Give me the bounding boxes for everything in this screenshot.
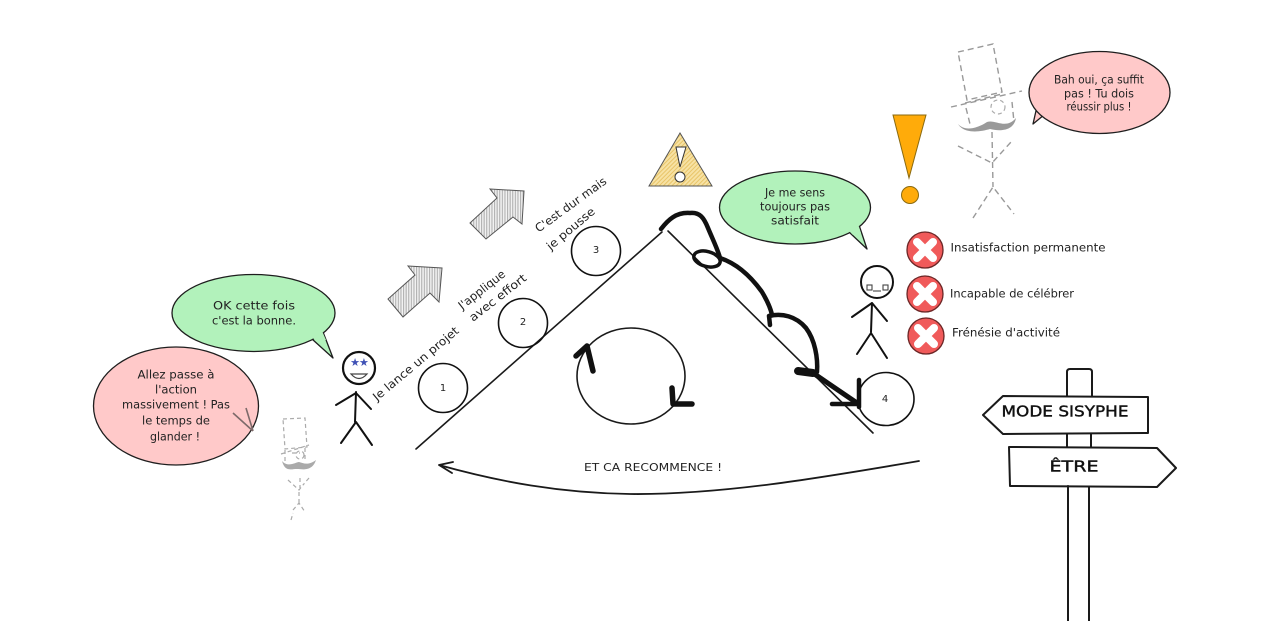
signpost: MODE SISYPHE (1002, 402, 1128, 420)
symptom: Insatisfaction permanente (907, 232, 1106, 268)
step 2 ball (498, 298, 548, 348)
label: C'est dur mais je pousse: je pousse (543, 204, 598, 254)
descending slope line (668, 231, 873, 433)
stick figure: happy with star eyes: ★★ (350, 356, 369, 369)
large ghost character with top hat (951, 44, 1022, 218)
label: ET CA RECOMMENCE !: ET CA RECOMMENCE ! (584, 462, 722, 474)
orange exclamation mark icon (893, 115, 926, 204)
label: J'applique avec effort: avec effort (466, 271, 530, 324)
step 4 ball (858, 372, 914, 426)
step 1 ball: 1 (440, 383, 446, 394)
thick tumbling path (661, 213, 859, 407)
signpost: ÊTRE (1050, 456, 1098, 476)
red speech bubble: Allez passe à l'action (94, 347, 258, 465)
main slope line up (416, 232, 662, 449)
hatched arrow 2 (470, 189, 524, 239)
red speech bubble: Allez passe à l'action: massivement ! Pas (122, 398, 230, 412)
signpost (983, 369, 1176, 621)
green speech bubble: OK cette fois (172, 274, 335, 358)
small ghost character with top hat (281, 418, 316, 520)
red speech bubble: Bah oui ça suffit (1029, 52, 1170, 134)
cycle circle with arrowheads (576, 328, 692, 424)
stick figure: tired (852, 266, 893, 358)
curved return arrow (439, 461, 919, 494)
red speech bubble: Bah oui ça suffit: pas ! Tu dois (1064, 86, 1134, 100)
red speech bubble: Allez passe à l'action: l'action (155, 382, 197, 396)
step 3 ball: 3 (593, 245, 599, 256)
red speech bubble: Allez passe à l'action: Allez passe à (138, 368, 214, 382)
label: C'est dur mais je pousse: C'est dur mais (532, 174, 609, 235)
label: Je lance un projet: Je lance un projet (369, 323, 462, 404)
label: J'applique avec effort: J'applique (455, 267, 508, 313)
step 2 ball: 2 (520, 317, 526, 328)
green speech bubble: Je me sens toujours pas satisfait (720, 171, 870, 249)
label: J'applique avec effort (455, 267, 530, 324)
red speech bubble: Bah oui ça suffit: Bah oui, ça suffit (1054, 72, 1144, 86)
symptom: Frénésie d'activité (908, 318, 1060, 354)
green speech bubble: OK cette fois: c'est la bonne. (212, 314, 296, 328)
red speech bubble: Bah oui ça suffit: réussir plus ! (1066, 100, 1132, 114)
symptom: Insatisfaction permanente: Insatisfaction permanente (950, 240, 1106, 254)
symptom: Incapable de célébrer (907, 276, 1074, 312)
symptom: Incapable de célébrer: Incapable de célébrer (950, 286, 1074, 300)
green speech bubble: Je me sens toujours pas satisfait: toujours pas (760, 200, 830, 214)
stick figure: happy with star eyes (336, 352, 375, 445)
red speech bubble: Allez passe à l'action: glander ! (150, 430, 200, 444)
step 1 ball (418, 364, 468, 412)
hatched arrow 1 (388, 266, 442, 317)
step 3 ball (572, 226, 620, 276)
green speech bubble: Je me sens toujours pas satisfait: satisfait (771, 214, 820, 228)
green speech bubble: Je me sens toujours pas satisfait: Je me sens (764, 186, 825, 200)
step 4 ball: 4 (882, 394, 888, 405)
symptom: Frénésie d'activité: Frénésie d'activité (952, 326, 1060, 340)
red speech bubble: Allez passe à l'action: le temps de (142, 414, 210, 428)
green speech bubble: OK cette fois: OK cette fois (213, 298, 295, 312)
warning triangle icon (649, 133, 712, 186)
